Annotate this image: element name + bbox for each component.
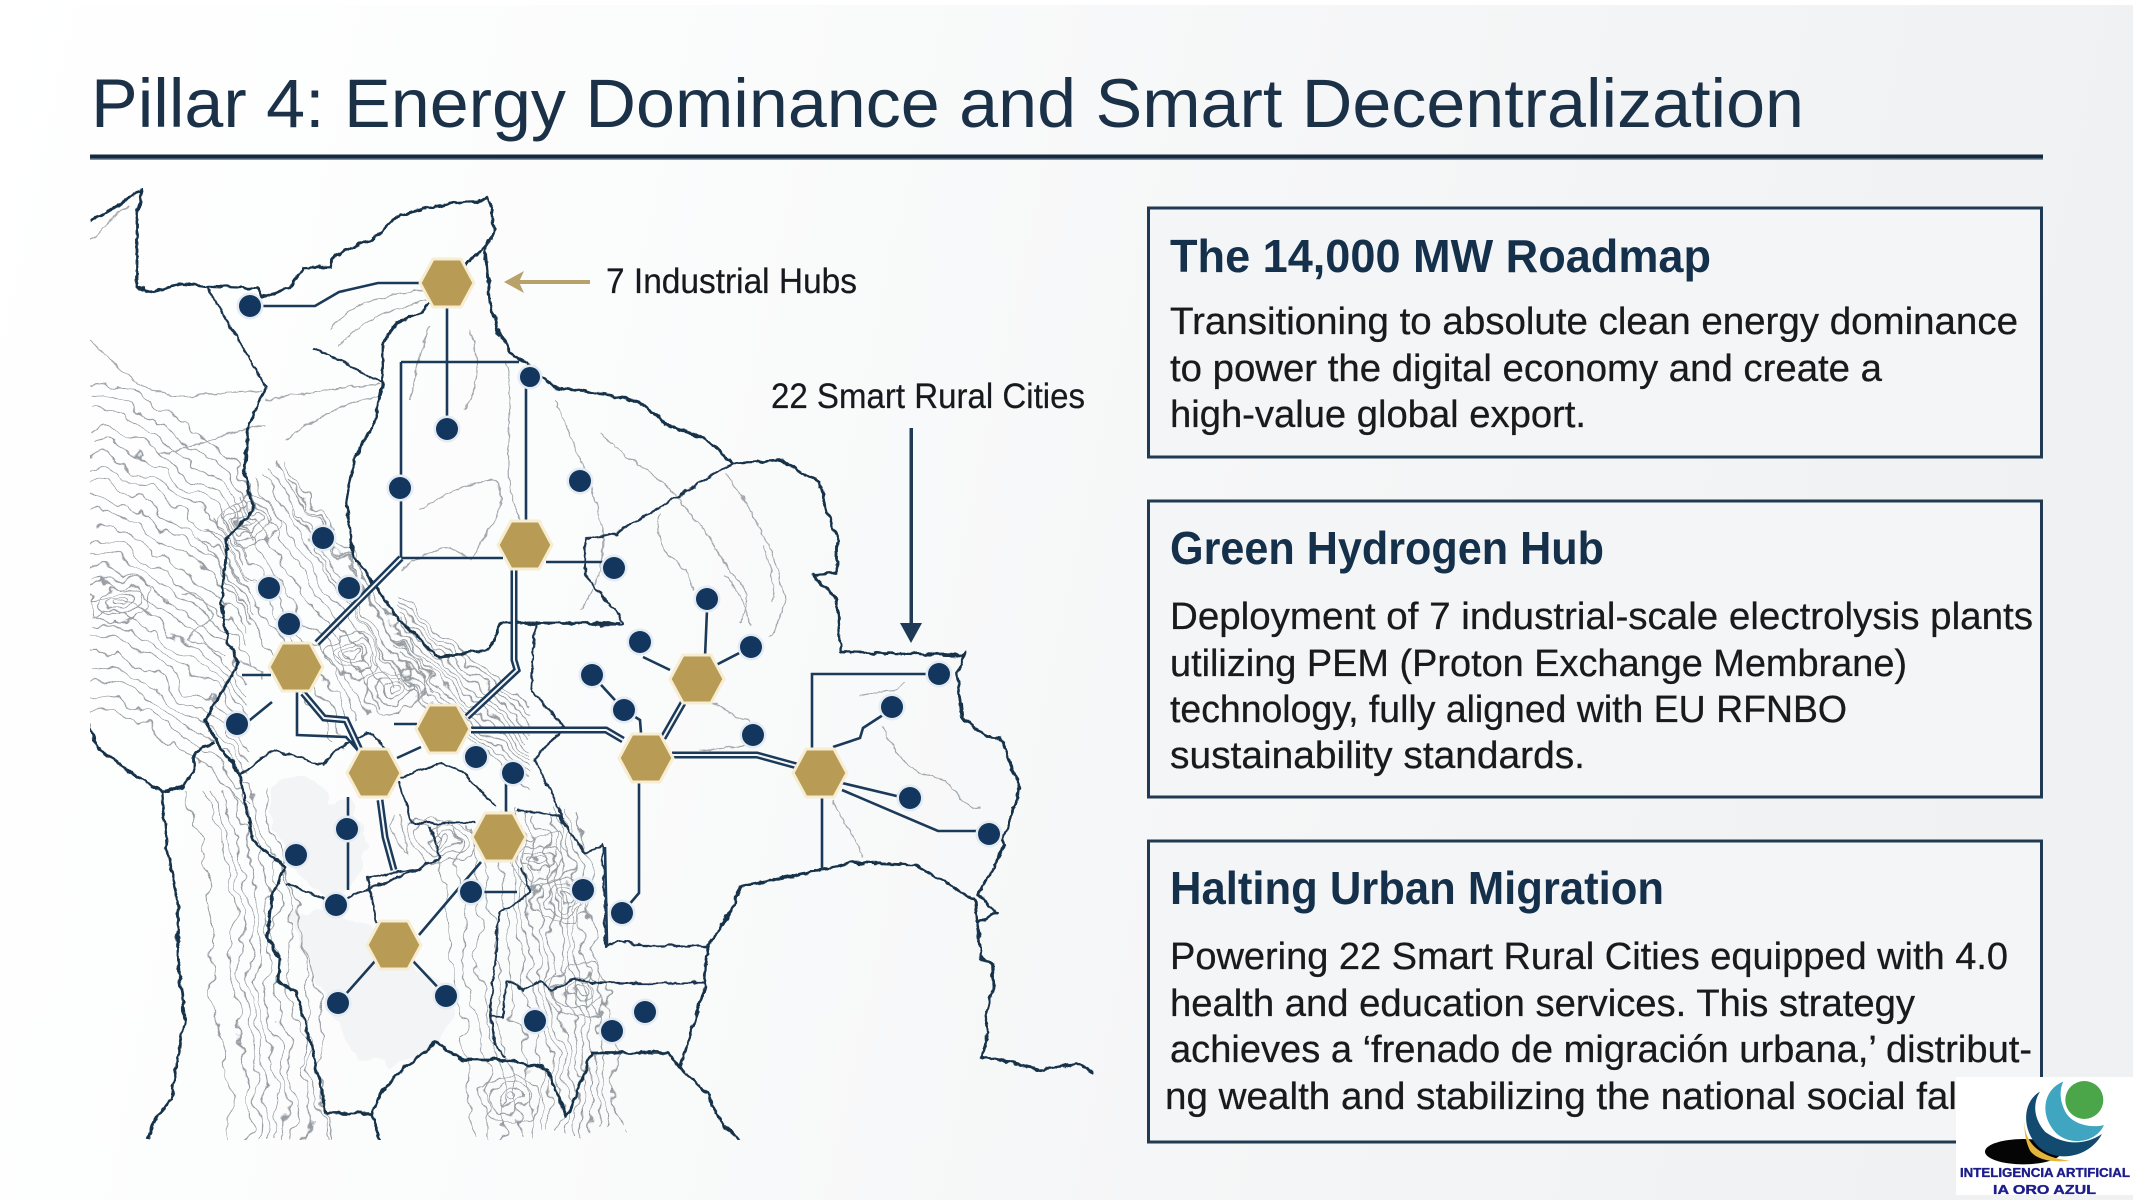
smart rural cities markers xyxy=(226,295,1000,1042)
body: roadmap: to power the digital economy and create a xyxy=(1170,348,1883,390)
body: urban migration xyxy=(1165,936,2032,1118)
panel: green hydrogen hub xyxy=(1148,501,2042,797)
body: urban migration: health and education services. This strategy xyxy=(1170,983,1915,1025)
body: roadmap xyxy=(1170,301,2018,436)
body: urban migration: achieves a ‘frenado de migración urbana,’ distribut- xyxy=(1170,1029,2032,1071)
map of Bolivia with energy network xyxy=(90,190,1093,1200)
body: roadmap: high-value global export. xyxy=(1170,394,1586,436)
rivers xyxy=(90,205,980,857)
title: Pillar 4: Energy Dominance and Smart Decentralization xyxy=(91,65,1804,142)
panel: the 14,000 MW roadmap xyxy=(1148,208,2042,457)
body: green hydrogen: sustainability standards. xyxy=(1170,735,1585,777)
body: green hydrogen: technology, fully aligned with EU RFNBO xyxy=(1170,689,1847,731)
body: urban migration: ng wealth and stabilizing the national social fal xyxy=(1165,1076,1957,1118)
panel: halting urban migration xyxy=(1148,841,2042,1142)
icon: globe logo mark xyxy=(1985,1081,2104,1164)
industrial hubs hexagons xyxy=(269,259,847,969)
title rule xyxy=(90,154,2043,160)
body: green hydrogen xyxy=(1170,596,2033,777)
territorial borders xyxy=(90,190,1093,1140)
heading: urban migration: Halting Urban Migration xyxy=(1170,862,1664,914)
arrow: to industrial hub xyxy=(504,271,590,293)
logo text: INTELIGENCIA ARTIFICIAL xyxy=(1960,1166,2130,1180)
heading: green hydrogen: Green Hydrogen Hub xyxy=(1170,522,1604,574)
power transmission lines xyxy=(242,283,978,1003)
label: 22 Smart Rural Cities: 22 Smart Rural Cities xyxy=(771,377,1085,416)
label: 7 Industrial Hubs: 7 Industrial Hubs xyxy=(606,262,857,301)
altiplano shaded zones xyxy=(270,782,449,1070)
body: urban migration: Powering 22 Smart Rural Cities equipped with 4.0 xyxy=(1170,936,2008,978)
arrow: to smart rural cities xyxy=(900,428,922,643)
logo text: IA ORO AZUL xyxy=(1993,1182,2096,1197)
logo: inteligencia artificial ia oro azul xyxy=(1956,1077,2133,1197)
body: roadmap: Transitioning to absolute clean energy dominance xyxy=(1170,301,2018,343)
topographic contour lines xyxy=(90,380,619,1200)
heading: roadmap: The 14,000 MW Roadmap xyxy=(1170,230,1711,282)
body: green hydrogen: Deployment of 7 industrial-scale electrolysis plants xyxy=(1170,596,2033,638)
logo text xyxy=(1960,1166,2130,1197)
body: green hydrogen: utilizing PEM (Proton Exchange Membrane) xyxy=(1170,643,1907,685)
